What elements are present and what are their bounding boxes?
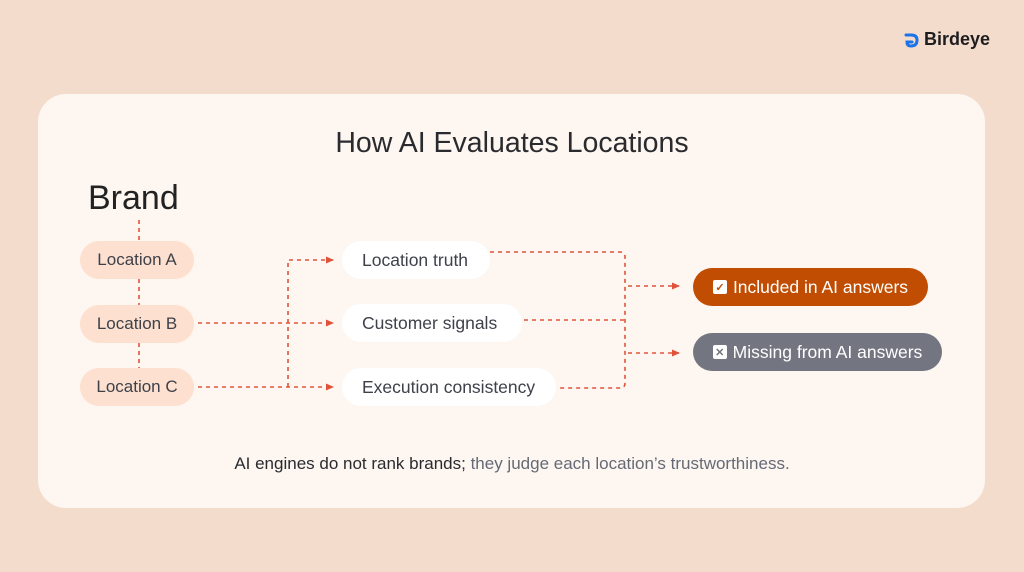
- pill: Customer signals: Customer signals: [362, 312, 497, 332]
- pill: Location truth: Location truth: [362, 250, 468, 270]
- pill: Location truth: [342, 241, 490, 279]
- pill: Location B: Location B: [97, 314, 177, 333]
- pill: Missing: ✕: [715, 346, 724, 358]
- pill: Location B: [80, 305, 194, 343]
- pill: Location C: Location C: [96, 377, 178, 396]
- pill: Missing: [693, 333, 942, 371]
- heading: Brand: Brand: [88, 179, 179, 217]
- pill: Included: [693, 268, 928, 306]
- title: How AI Evaluates Locations: [335, 127, 689, 159]
- pill: Missing: Missing from AI answers: [733, 342, 922, 362]
- pill: Execution consistency: [342, 368, 556, 406]
- footnote: AI engines do not rank brands; they judge each location’s trustworthiness.: [234, 454, 790, 473]
- pill: Location A: Location A: [97, 250, 177, 269]
- pill: Included: ✓: [715, 282, 725, 294]
- pill: Execution consistency: Execution consistency: [362, 376, 535, 396]
- pill: Location A: [80, 241, 194, 279]
- pill: Location C: [80, 368, 194, 406]
- pill: Customer signals: [342, 304, 522, 342]
- pill: Included: Included in AI answers: [733, 276, 908, 296]
- card: [38, 94, 985, 508]
- logo: Birdeye: Birdeye: [924, 29, 990, 49]
